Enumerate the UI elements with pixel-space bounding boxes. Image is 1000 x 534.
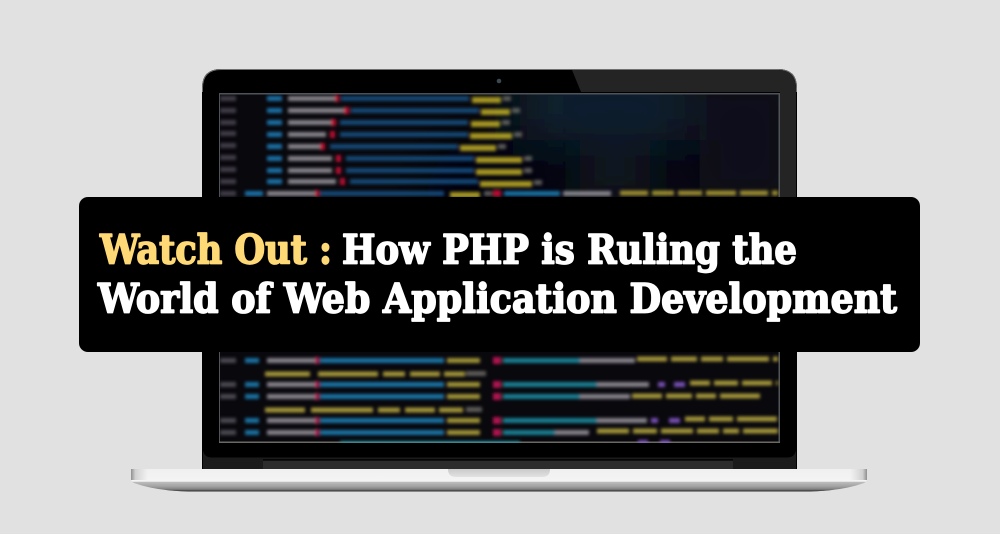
screen with blurred code <box>219 70 790 444</box>
laptop illustration <box>131 69 867 492</box>
dark glare on bezel <box>572 70 796 300</box>
trackpad notch <box>448 469 550 477</box>
code lines, lower block <box>220 357 778 444</box>
hinge strip <box>203 450 796 469</box>
laptop base <box>131 469 867 492</box>
webcam <box>497 79 501 83</box>
title line 1: How PHP is Ruling the <box>342 226 797 274</box>
title panel <box>79 197 920 352</box>
laptop lid <box>202 69 797 469</box>
title line 1 highlight: Watch Out : <box>99 226 332 274</box>
title line 2: World of Web Application Development <box>97 276 897 322</box>
code lines, upper block <box>220 95 778 198</box>
